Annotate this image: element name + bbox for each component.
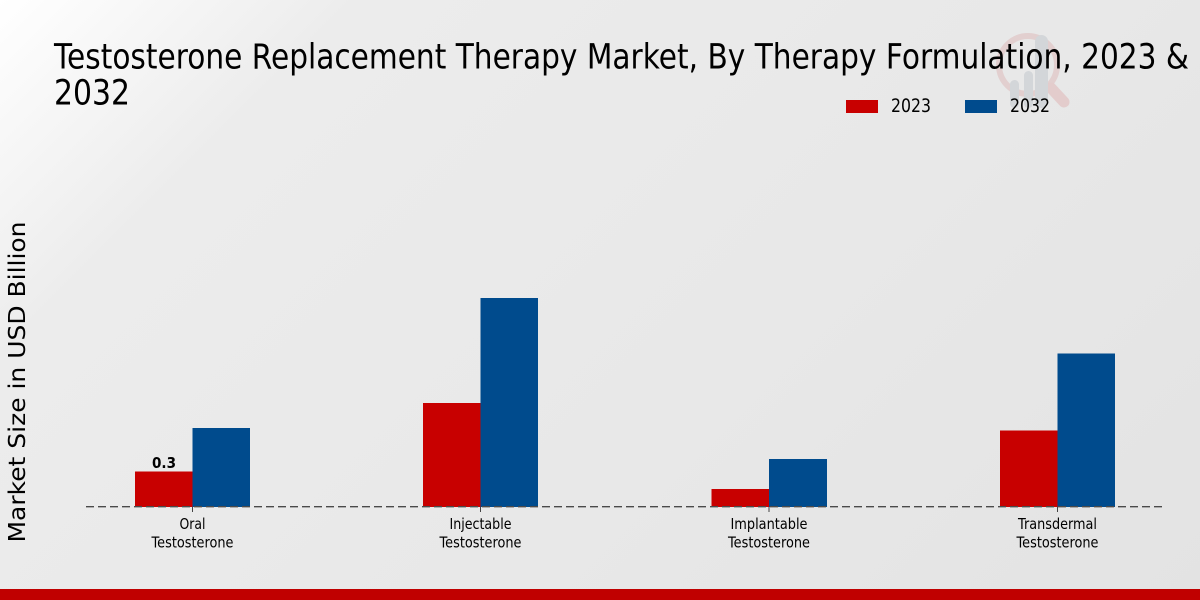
bars: Injectable Testosterone [423, 298, 538, 507]
x label: Injectable Testosterone: Testosterone [439, 534, 522, 552]
x label: Implantable Testosterone [727, 515, 810, 552]
legend: 2023 [846, 95, 931, 117]
baseline axis [86, 506, 1164, 508]
icon: watermark magnifier with bars [999, 35, 1064, 108]
legend [846, 95, 1050, 117]
x label: Transdermal Testosterone [1016, 515, 1098, 552]
footer bar [0, 589, 1200, 600]
x label: Oral Testosterone: Oral [180, 515, 206, 533]
data label: 0.3 [152, 454, 176, 472]
x label: Injectable Testosterone: Injectable [450, 515, 512, 533]
x label: Oral Testosterone [151, 515, 234, 552]
legend: 2023: 2023 [891, 95, 931, 117]
bars: Transdermal Testosterone [1000, 354, 1115, 507]
y axis label: Market Size in USD Billion [3, 222, 31, 542]
x label: Transdermal Testosterone: Transdermal [1017, 515, 1097, 533]
x label: Transdermal Testosterone: Testosterone [1016, 534, 1098, 552]
x label: Implantable Testosterone: Testosterone [727, 534, 810, 552]
x label: Implantable Testosterone: Implantable [730, 515, 808, 533]
x label: Oral Testosterone: Testosterone [151, 534, 234, 552]
x label: Injectable Testosterone [439, 515, 522, 552]
title: 2032 [54, 74, 130, 114]
bars: Implantable Testosterone [712, 459, 827, 507]
legend: 2032: 2032 [1010, 95, 1050, 117]
bars: Oral Testosterone [135, 428, 250, 507]
title [53, 38, 1189, 114]
bar chart [86, 298, 1164, 552]
legend: 2032 [965, 95, 1050, 117]
